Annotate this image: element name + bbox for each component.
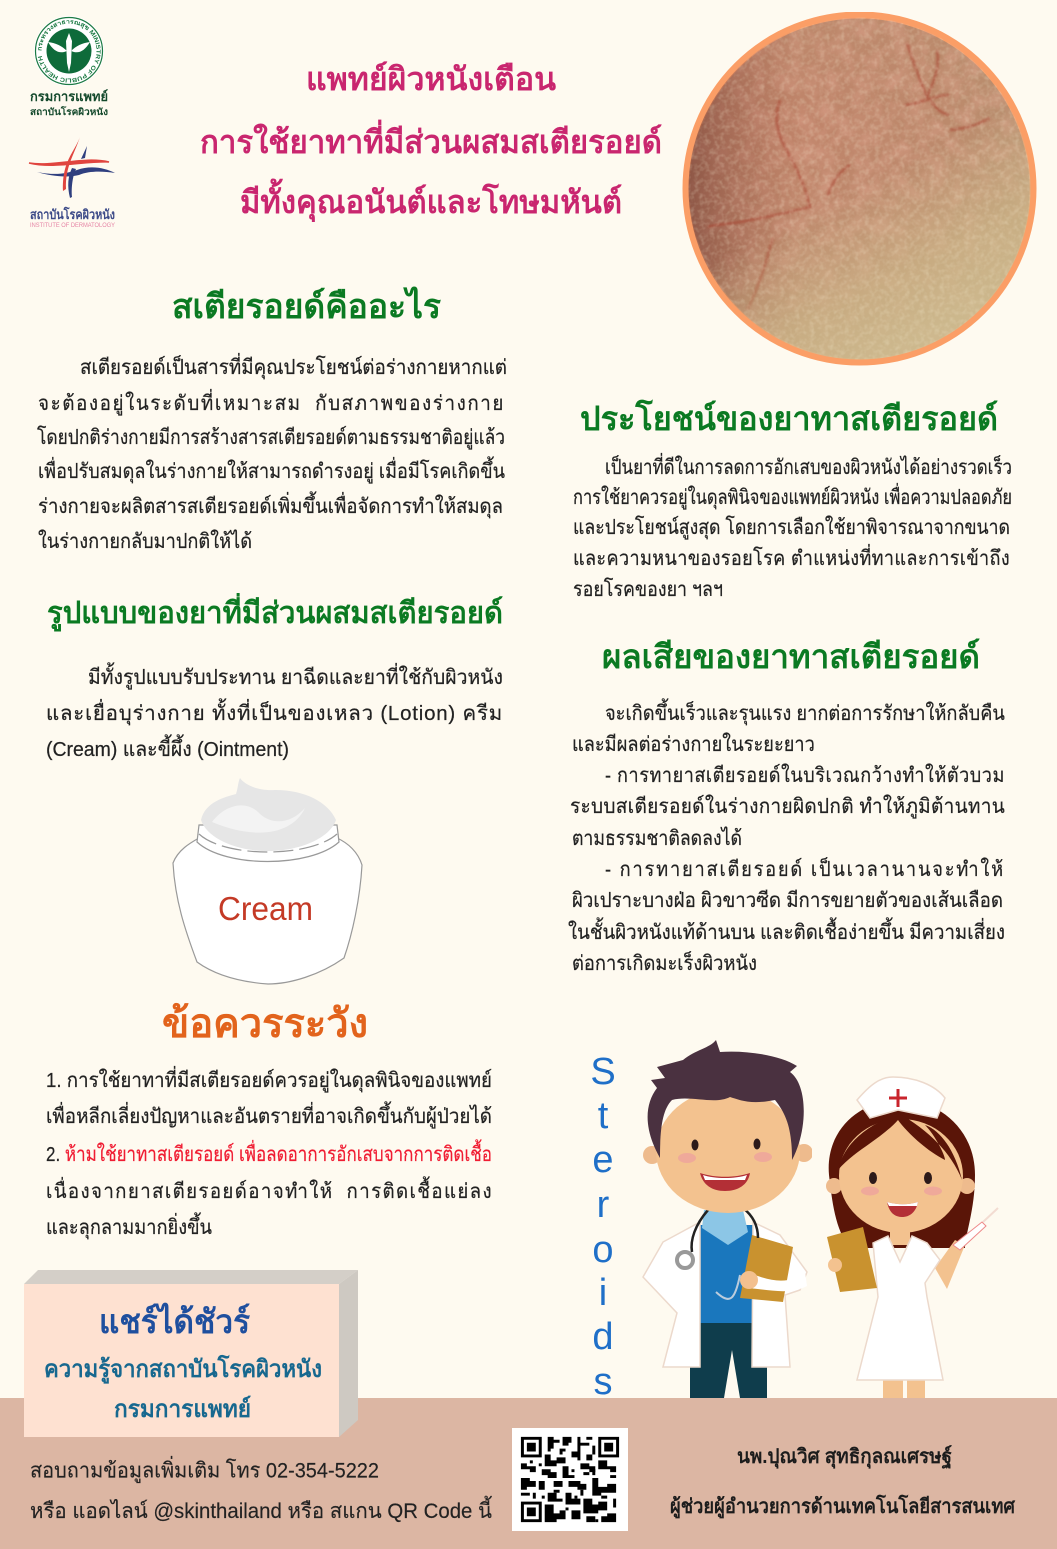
jar label: Cream — [218, 890, 313, 927]
paragraph: side effects: จะเกิดขึ้นเร็วและรุนแรง ยากต่อการรักษาให้กลับคืน — [605, 698, 1005, 726]
signature: doctor: นพ.ปุณวิศ สุทธิกุลณเศรษฐ์ — [737, 1445, 952, 1470]
heading: precautions: ข้อควรระวัง — [162, 1002, 368, 1046]
paragraph: benefits: และความหนาของรอยโรค ตำแหน่งที่ทาและการเข้าถึง — [573, 544, 1010, 570]
share box text: กรมการแพทย์ — [114, 1395, 251, 1423]
precautions list — [46, 1066, 493, 1240]
footer band — [0, 1398, 1057, 1549]
paragraph: side effects: - การทายาสเตียรอยด์ในบริเวณกว้างทำให้ตัวบวม — [605, 763, 1005, 787]
doctor head — [643, 1146, 661, 1164]
heading: side effects: ผลเสียของยาทาสเตียรอยด์ — [602, 638, 980, 675]
paragraph: side effects: ในชั้นผิวหนังแท้ด้านบน และติดเชื้อง่ายขึ้น มีความเสี่ยง — [568, 917, 1005, 944]
nurse hair — [829, 1100, 975, 1248]
vertical word: Steroids: i — [599, 1272, 607, 1314]
skin photo circle — [682, 12, 1036, 366]
doctor clipboard — [740, 1235, 793, 1302]
vertical word: Steroids: S — [590, 1051, 616, 1093]
paragraph: forms of steroid: (Cream) และขี้ผึ้ง (Ointment) — [46, 734, 289, 761]
title: แพทย์ผิวหนังเตือน — [306, 61, 556, 97]
doctor trousers — [690, 1322, 767, 1398]
doctor coat — [643, 1222, 807, 1367]
stethoscope — [692, 1208, 758, 1252]
vertical word: Steroids: t — [598, 1095, 608, 1137]
logo: Ministry of Public Health: กรมการแพทย์ — [30, 89, 108, 104]
paragraph: benefits: และประโยชน์สูงสุด โดยการเลือกใช้ยาพิจารณาจากขนาด — [573, 515, 1010, 540]
nurse legs — [883, 1375, 903, 1398]
logo: Ministry of Public Health — [30, 16, 108, 118]
title: มีทั้งคุณอนันต์และโทษมหันต์ — [240, 178, 622, 223]
paragraph: side effects — [568, 698, 1005, 975]
paragraph: side effects: และมีผลต่อร่างกายในระยะยาว — [572, 732, 815, 756]
paragraph: what is a steroid — [37, 352, 507, 553]
heading: benefits: ประโยชน์ของยาทาสเตียรอยด์ — [580, 399, 998, 437]
vertical word: Steroids: o — [592, 1229, 614, 1271]
illustration: nurse — [826, 1076, 998, 1398]
logo: Ministry of Public Health: สถาบันโรคผิวหนัง — [30, 106, 108, 118]
logo: Institute of Dermatology — [28, 138, 115, 229]
vertical word: Steroids — [590, 1051, 616, 1403]
nurse neck — [890, 1225, 910, 1245]
paragraph: benefits: รอยโรคของยา ฯลฯ — [573, 577, 723, 601]
nurse head — [826, 1178, 842, 1194]
paragraph: benefits — [573, 452, 1012, 601]
vertical word: Steroids: s — [594, 1361, 612, 1403]
doctor scrubs — [700, 1225, 753, 1323]
paragraph: side effects: ตามธรรมชาติลดลงได้ — [572, 826, 742, 850]
title — [200, 61, 662, 223]
paragraph: what is a steroid: ในร่างกายกลับมาปกติให้ได้ — [38, 529, 252, 553]
share box text — [44, 1354, 322, 1423]
nurse arm and syringe — [935, 1240, 965, 1289]
title: การใช้ยาทาที่มีส่วนผสมสเตียรอยด์ — [200, 119, 662, 160]
icon: cream jar — [172, 778, 363, 985]
paragraph: side effects: ระบบสเตียรอยด์ในร่างกายผิดปกติ ทำให้ภูมิต้านทาน — [570, 794, 1005, 818]
signature: doctor — [670, 1445, 1016, 1520]
heading: forms of steroid: รูปแบบของยาที่มีส่วนผสมสเตียรอยด์ — [47, 593, 503, 632]
vertical word: Steroids: e — [592, 1139, 614, 1181]
nurse dress — [857, 1236, 943, 1380]
precautions list: และลุกลามมากยิ่งขึ้น — [46, 1212, 212, 1240]
heading: what is a steroid: สเตียรอยด์คืออะไร — [172, 286, 442, 326]
share box heading: แชร์ได้ชัวร์ — [99, 1302, 250, 1340]
callout: share box — [24, 1270, 358, 1437]
vertical word: Steroids: d — [592, 1316, 614, 1358]
paragraph: side effects: ต่อการเกิดมะเร็งผิวหนัง — [572, 950, 757, 975]
logo: Institute of Dermatology: INSTITUTE OF DERMATOLOGY — [30, 223, 115, 229]
paragraph: side effects: - การทายาสเตียรอยด์ เป็นเวลานานจะทำให้ — [605, 856, 1005, 881]
nurse clipboard — [827, 1227, 877, 1292]
paragraph: forms of steroid: และเยื่อบุร่างกาย ทั้งที่เป็นของเหลว (Lotion) ครีม — [46, 698, 503, 726]
paragraph: forms of steroid — [46, 662, 503, 761]
illustration: doctor — [642, 1040, 812, 1398]
logo: Ministry of Public Health: กระทรวงสาธารณสุข MINISTRY OF PUBLIC HEALTH — [38, 20, 101, 83]
vertical word: Steroids: r — [597, 1184, 609, 1226]
share box text: ความรู้จากสถาบันโรคผิวหนัง — [44, 1354, 322, 1384]
contact text — [30, 1456, 492, 1523]
paragraph: side effects: ผิวเปราะบางฝ่อ ผิวขาวซีด มีการขยายตัวของเส้นเลือด — [572, 889, 1003, 912]
QR code — [512, 1428, 628, 1531]
nurse cap — [857, 1077, 945, 1118]
contact text: สอบถามข้อมูลเพิ่มเติม โทร 02-354-5222 — [30, 1456, 379, 1484]
contact text: หรือ แอดไลน์ @skinthailand หรือ สแกน QR Code นี้ — [30, 1496, 492, 1523]
